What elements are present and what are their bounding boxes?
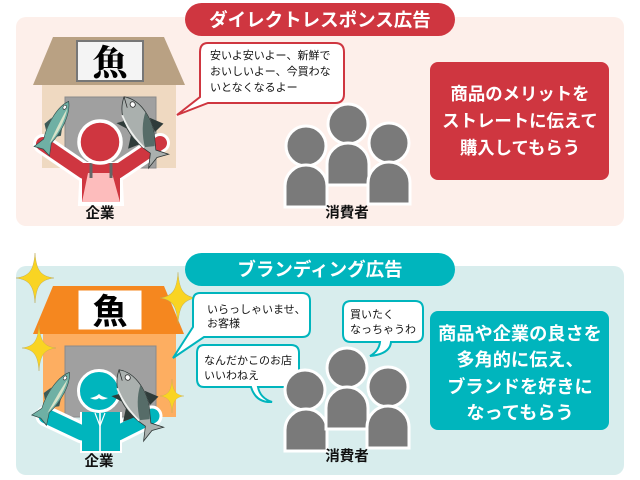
speech bubble: shopkeeper: おいしいよー、今買わな <box>210 64 331 78</box>
callout: direct response message <box>430 62 609 180</box>
heading: direct response: ダイレクトレスポンス広告 <box>209 10 431 30</box>
label: company: 企業 <box>84 452 114 470</box>
speech bubble: nice shop <box>197 345 299 402</box>
icon: consumers <box>285 104 410 207</box>
panel: direct response advertising <box>16 3 624 226</box>
icon: shopkeeper with fish <box>32 86 179 204</box>
illustration: bright fish shop: 魚 <box>92 293 128 332</box>
icon: sparkles <box>16 253 196 413</box>
speech bubble: shopkeeper <box>177 43 344 115</box>
illustration: bright fish shop <box>33 286 184 417</box>
callout: direct response message: 購入してもらう <box>460 138 580 158</box>
speech bubble: want to buy: なっちゃうわ <box>350 323 416 336</box>
callout: branding message <box>430 311 609 430</box>
speech bubble: want to buy: 買いたく <box>350 308 394 321</box>
callout: branding message: 多角的に伝え、 <box>456 349 584 370</box>
panel: branding advertising <box>16 253 624 475</box>
speech bubble: shopkeeper: 安いよ安いよー、新鮮で <box>210 48 330 62</box>
callout: direct response message: ストレートに伝えて <box>442 111 598 131</box>
speech bubble: shopkeeper: いとなくなるよー <box>210 81 298 94</box>
speech bubble: want to buy <box>343 301 423 356</box>
heading: branding <box>185 253 455 286</box>
speech bubble: nice shop: いいわねえ <box>204 369 259 382</box>
speech bubble: welcome: お客様 <box>207 316 240 330</box>
label: consumers: 消費者 <box>325 204 369 222</box>
speech bubble: welcome <box>173 293 310 358</box>
callout: branding message: 商品や企業の良さを <box>438 324 602 344</box>
label: consumers: 消費者 <box>325 447 369 465</box>
label: company: 企業 <box>86 204 115 222</box>
speech bubble: nice shop: なんだかこのお店 <box>204 354 292 367</box>
heading: direct response <box>185 3 455 36</box>
illustration: fish shop <box>33 36 185 168</box>
icon: businessman with fish <box>30 359 174 453</box>
heading: branding: ブランディング広告 <box>237 259 403 280</box>
illustration: fish shop: 魚 <box>92 36 130 86</box>
callout: branding message: ブランドを好きに <box>447 376 593 397</box>
icon: consumers <box>285 348 409 451</box>
speech bubble: welcome: いらっしゃいませ、 <box>207 303 306 316</box>
callout: direct response message: 商品のメリットを <box>450 84 590 104</box>
callout: branding message: なってもらう <box>466 403 574 423</box>
